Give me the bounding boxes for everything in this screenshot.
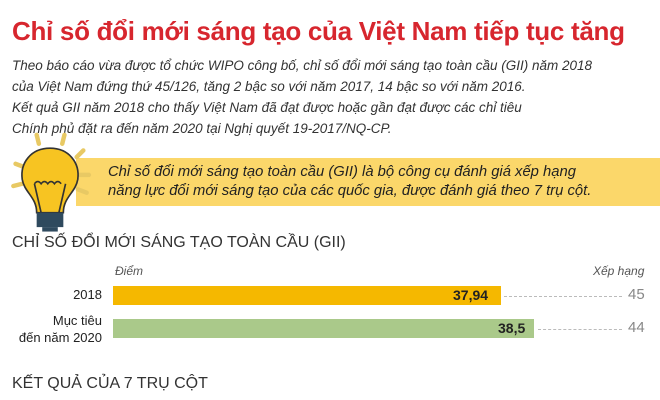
bar 2018 — [73, 286, 645, 305]
intro text: của Việt Nam đứng thứ 45/126, tăng 2 bậc so với năm 2017, 14 bậc so với năm 2016. — [12, 79, 526, 94]
bar 2018: 2018 — [73, 287, 102, 302]
bar chart — [19, 264, 645, 345]
bar 2020 target — [19, 313, 645, 345]
callout text: năng lực đổi mới sáng tạo của các quốc gia, được đánh giá theo 7 trụ cột. — [108, 183, 591, 199]
bar 2018: 45 — [628, 286, 645, 303]
intro text: Theo báo cáo vừa được tổ chức WIPO công bố, chỉ số đổi mới sáng tạo toàn cầu (GII) năm 2018 — [12, 58, 592, 73]
bar 2020 target: đến năm 2020 — [19, 330, 102, 345]
bar 2020 target: Mục tiêu — [53, 313, 102, 328]
callout band — [76, 158, 660, 206]
bar 2018: 37,94 — [453, 287, 488, 303]
intro text: Kết quả GII năm 2018 cho thấy Việt Nam đã đạt được hoặc gần đạt được các chỉ tiêu — [12, 100, 522, 115]
bar 2020 target: 38,5 — [498, 320, 525, 336]
callout text — [108, 164, 591, 199]
callout text: Chỉ số đổi mới sáng tạo toàn cầu (GII) là bộ công cụ đánh giá xếp hạng — [108, 164, 576, 180]
section heading: 7 pillars: KẾT QUẢ CỦA 7 TRỤ CỘT — [12, 375, 208, 392]
intro text — [12, 58, 592, 136]
section heading: GII: CHỈ SỐ ĐỔI MỚI SÁNG TẠO TOÀN CẦU (GII) — [12, 234, 346, 251]
bar chart: Điểm — [115, 264, 143, 278]
title: Chỉ số đổi mới sáng tạo của Việt Nam tiếp tục tăng — [12, 16, 625, 46]
intro text: Chính phủ đặt ra đến năm 2020 tại Nghị quyết 19-2017/NQ-CP. — [12, 121, 392, 136]
bar 2020 target: 44 — [628, 319, 645, 336]
bar chart: Xếp hạng — [593, 264, 644, 278]
icon: light bulb — [11, 132, 91, 232]
